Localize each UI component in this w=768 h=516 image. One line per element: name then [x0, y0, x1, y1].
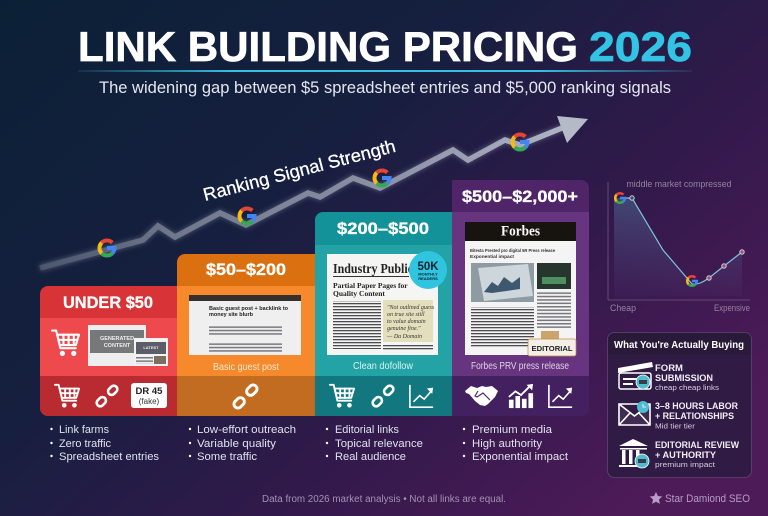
icon: growth bars — [509, 384, 533, 408]
thumbnail: industry publication: genuine fine." — [387, 325, 421, 332]
list: $200-$500 features: Real audience — [335, 451, 406, 463]
heading: $500-$2,000+: $500–$2,000+ — [462, 187, 578, 206]
thumbnail: generated content — [88, 325, 168, 366]
icon: broken link — [95, 384, 119, 408]
icon: google marker 1 — [100, 241, 114, 255]
thumbnail: industry publication: Partial Paper Pages for — [333, 281, 408, 290]
badge: DR 45 fake: DR 45 — [136, 386, 163, 397]
icon: cart — [52, 331, 79, 356]
icon: handshake — [465, 386, 498, 406]
thumbnail: generated content: GENERATED — [100, 336, 134, 342]
line chart: middle market compressed — [608, 179, 750, 314]
badge: editorial stamp — [528, 339, 576, 356]
list: $500-$2,000+ features: Exponential impact — [472, 451, 568, 463]
text: editorial review and authority: EDITORIAL REVIEW — [655, 440, 739, 451]
thumbnail: industry publication: on true site still — [387, 312, 425, 318]
list: $50-$200 features: Some traffic — [197, 451, 257, 463]
thumbnail: industry publication — [327, 254, 438, 355]
list: under $50 features: Link farms — [59, 424, 109, 436]
list: $50-$200 features — [189, 424, 296, 463]
caption: basic guest post: Basic guest post — [213, 362, 279, 373]
icon: envelope with clock — [619, 401, 650, 425]
icon: cart — [330, 385, 354, 408]
icon: google marker 3 — [375, 171, 390, 185]
list: $200-$500 features: Editorial links — [335, 424, 399, 436]
axis label: cheap: Cheap — [610, 303, 636, 314]
text: editorial review and authority: + AUTHORITY — [655, 450, 717, 461]
icon: trend chart — [549, 385, 572, 407]
list: under $50 features: Zero traffic — [59, 438, 111, 450]
icon: payment card — [618, 362, 653, 389]
text: form submission: SUBMISSION — [655, 373, 713, 384]
thumbnail: generated content: LATEST — [143, 345, 159, 350]
text: hours labor and relationships: + RELATIONSHIPS — [655, 411, 734, 422]
icon: trend chart — [410, 385, 433, 407]
thumbnail: generated content: CONTENT — [104, 343, 131, 349]
icon: google marker 2 — [240, 209, 254, 223]
icon: google high — [615, 193, 625, 203]
text: form submission: cheap cheap links — [655, 383, 719, 392]
subtitle: The widening gap between $5 spreadsheet entries and $5,000 ranking signals — [99, 79, 671, 97]
text: hours labor and relationships — [655, 401, 738, 430]
panel heading: What You're Actually Buying — [614, 339, 744, 351]
thumbnail: forbes article — [465, 222, 576, 355]
list: $200-$500 features — [326, 424, 423, 463]
text: editorial review and authority: premium impact — [655, 460, 716, 469]
thumbnail: industry publication: Industry Public — [333, 261, 413, 276]
badge: DR 45 fake — [131, 383, 167, 408]
text: hours labor and relationships: Mid tier tier — [655, 424, 696, 430]
icon: bank with badge — [619, 439, 649, 468]
text: editorial review and authority — [655, 440, 739, 469]
arrow: ranking signal trend — [40, 116, 588, 268]
list: under $50 features — [50, 424, 160, 463]
thumbnail: industry publication: to value domain — [387, 319, 426, 325]
badge: 50K monthly readers: READERS — [418, 276, 438, 281]
icon: link — [232, 383, 259, 410]
list: $500-$2,000+ features: High authority — [472, 438, 543, 450]
badge: 50K monthly readers — [409, 251, 447, 289]
thumbnail: guest post — [189, 295, 301, 355]
list: $500-$2,000+ features: Premium media — [472, 424, 553, 436]
footnote: Data from 2026 market analysis • Not all links are equal. — [262, 494, 506, 505]
caption: forbes press release: Forbes PRV press release — [471, 361, 569, 372]
list: $50-$200 features: Variable quality — [197, 438, 277, 450]
thumbnail: forbes article: Forbes — [501, 224, 540, 240]
panel: under $50 — [40, 286, 177, 416]
icon: google marker 4 — [513, 135, 528, 149]
panel: what you're actually buying — [608, 332, 752, 478]
panel: $500-$2,000+ — [452, 180, 589, 416]
label: ranking signal strength: Ranking Signal Strength — [201, 136, 398, 205]
title: LINK BUILDING PRICING — [78, 23, 578, 70]
thumbnail: industry publication: Quality Content — [333, 289, 385, 298]
thumbnail: forbes article: Exponential impact — [470, 254, 514, 260]
thumbnail: industry publication: "Not outlined guess — [387, 305, 435, 311]
thumbnail: industry publication: — Da Domain — [386, 334, 422, 340]
title: 2026 — [589, 23, 692, 70]
caption: clean dofollow: Clean dofollow — [353, 361, 414, 372]
chart points — [630, 196, 744, 280]
heading: under $50: UNDER $50 — [63, 293, 153, 312]
axis label: expensive: Expensive — [714, 303, 750, 314]
text: form submission: FORM — [655, 363, 683, 374]
icon: broken link — [371, 384, 395, 408]
brand: star damiond seo: Star Damiond SEO — [665, 493, 750, 505]
heading: $50-$200: $50–$200 — [206, 260, 286, 279]
text: form submission — [655, 363, 719, 392]
badge: 50K monthly readers: MONTHLY — [418, 272, 438, 276]
heading: $200-$500: $200–$500 — [337, 219, 429, 238]
icon: cart small — [55, 385, 79, 408]
list: $500-$2,000+ features — [463, 424, 568, 463]
list: $200-$500 features: Topical relevance — [335, 438, 423, 450]
list: under $50 features: Spreadsheet entries — [59, 451, 160, 463]
text: hours labor and relationships: 3–8 HOURS LABOR — [655, 401, 738, 412]
list: $50-$200 features: Low-effort outreach — [197, 424, 296, 436]
badge: DR 45 fake: (fake) — [139, 397, 160, 406]
icon: google low — [687, 276, 697, 286]
badge: editorial stamp: EDITORIAL — [532, 344, 573, 353]
chart title: middle market compressed — [626, 179, 732, 190]
panel: $200-$500 — [315, 212, 452, 416]
badge: 50K monthly readers: 50K — [417, 261, 439, 273]
thumbnail: guest post: money site blurb — [209, 312, 254, 318]
thumbnail: guest post: Basic guest post + backlink to — [209, 306, 289, 312]
thumbnail: forbes article: Bitesta Prested pro digital 5R Press release — [470, 248, 555, 254]
panel: $50-$200 — [177, 254, 315, 416]
